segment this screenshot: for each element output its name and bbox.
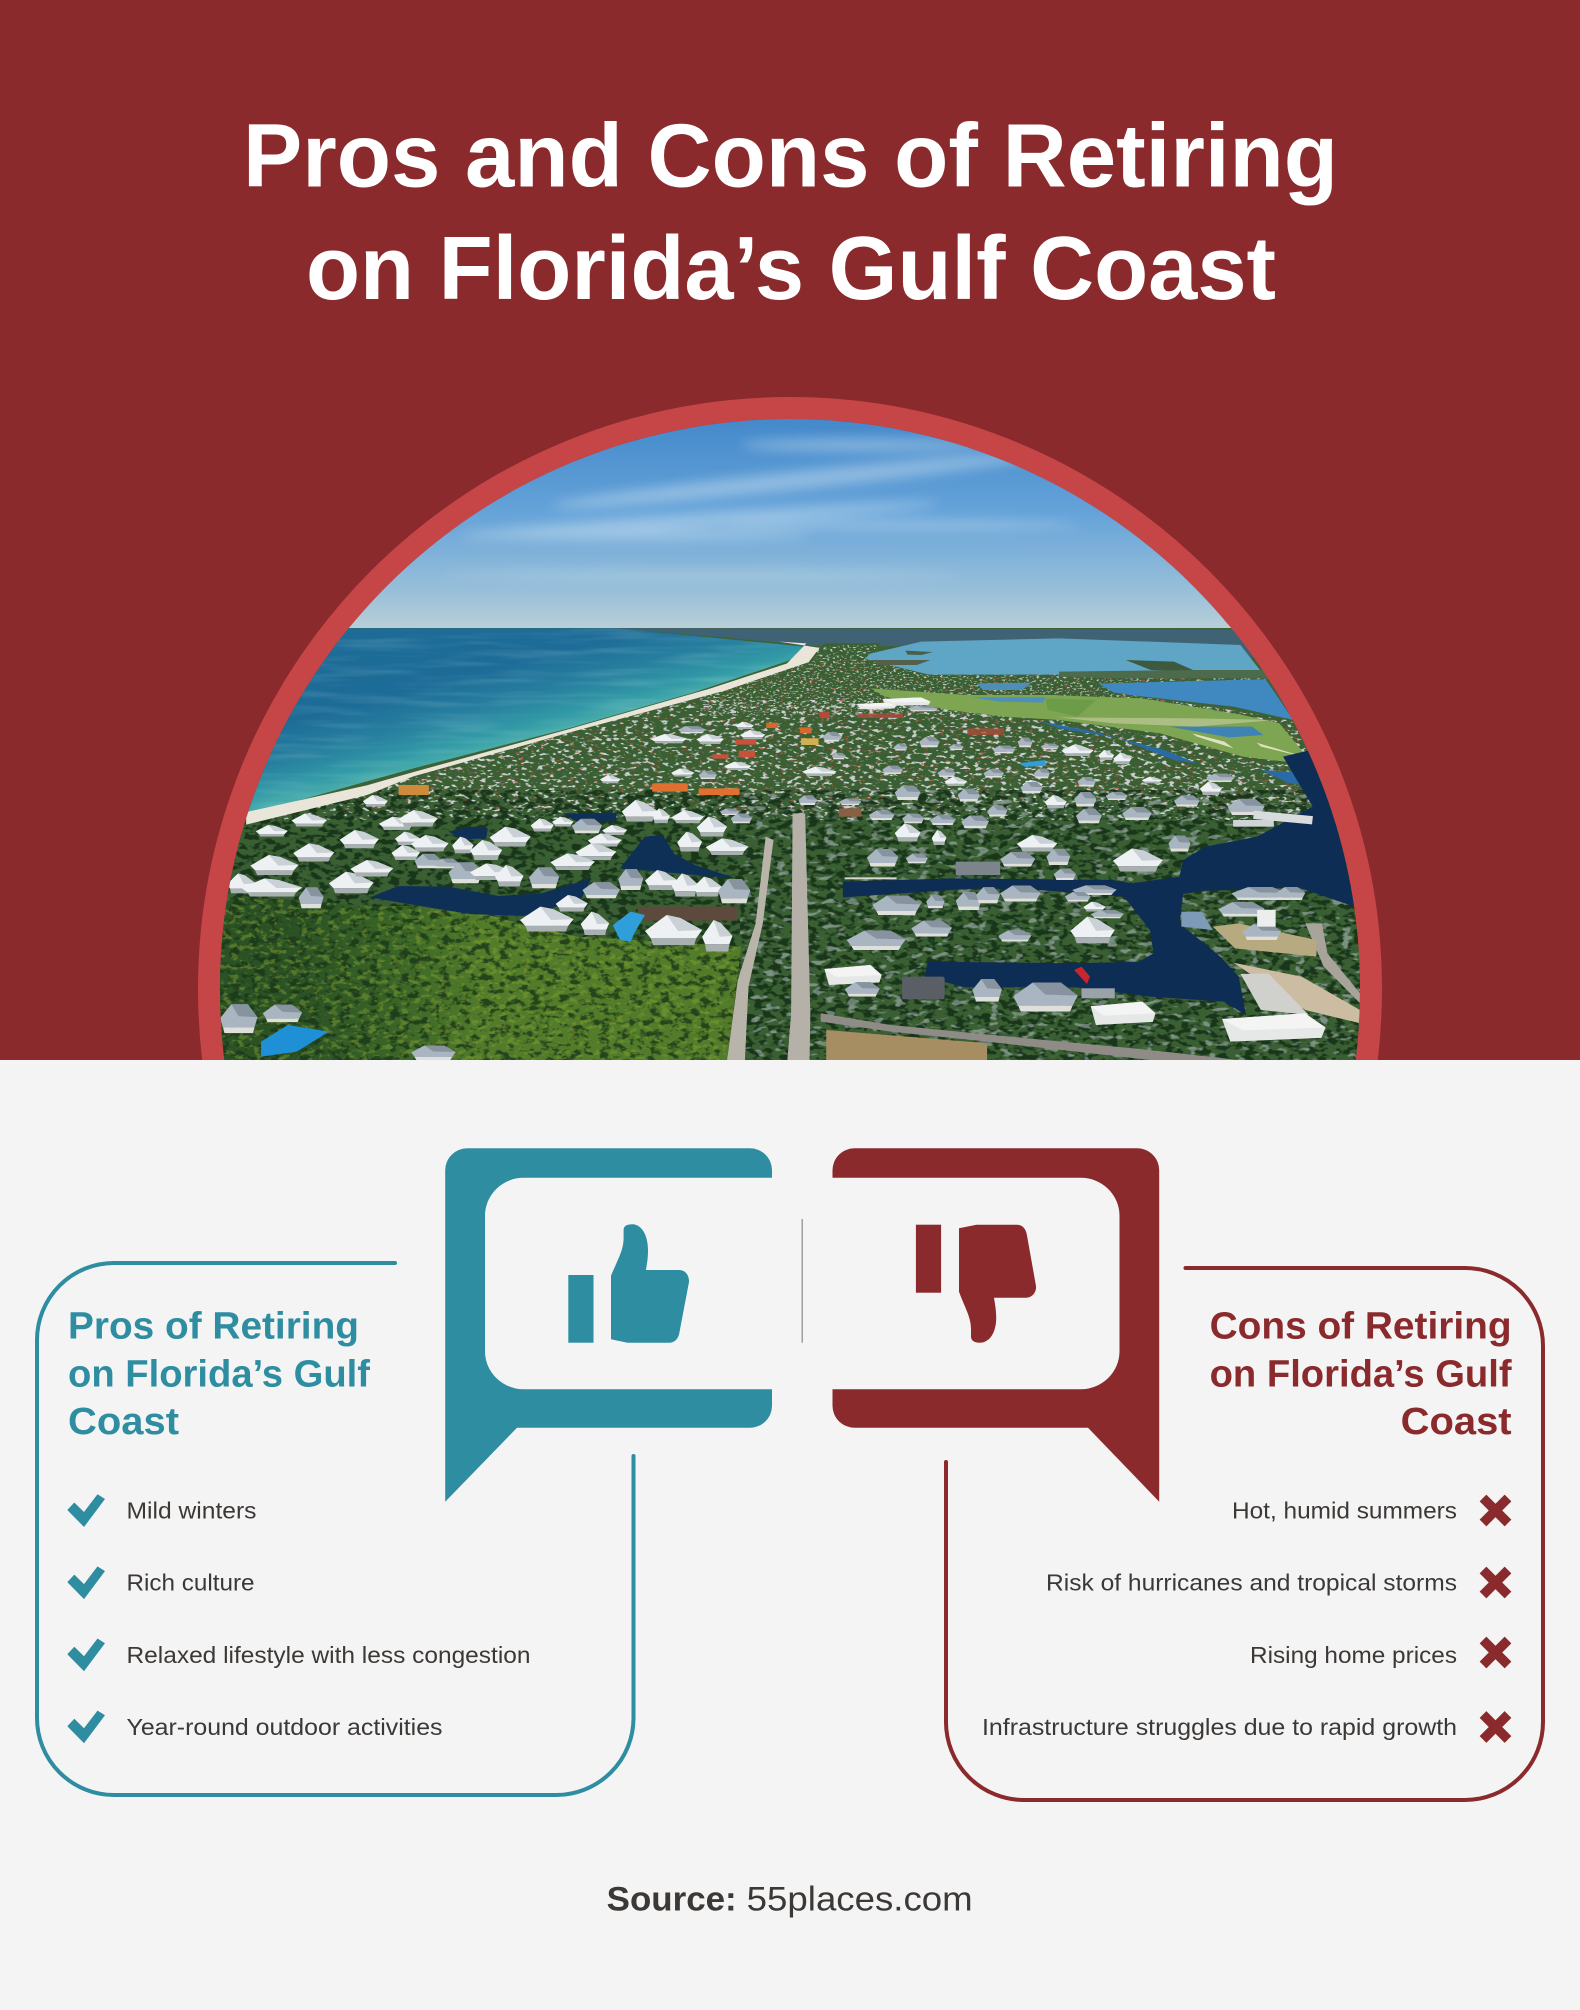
icon: check 4 <box>67 1711 105 1743</box>
item: home prices: Rising home prices <box>1250 1642 1457 1668</box>
pros heading: Coast <box>68 1401 179 1443</box>
pros heading <box>68 1306 370 1443</box>
panel: cons <box>946 1268 1543 1800</box>
speech bubble: pros <box>445 1148 772 1502</box>
photo: aerial view of gulf coast <box>180 410 1400 1068</box>
right dark water <box>843 747 1372 1015</box>
title: on Florida’s Gulf Coast <box>306 219 1276 319</box>
icon: thumbs down <box>916 1225 1036 1343</box>
panel: pros <box>37 1263 634 1795</box>
houses left cluster <box>220 783 752 1060</box>
title <box>243 107 1338 319</box>
divider between bubbles <box>802 1219 803 1343</box>
icon: x 4 <box>1483 1714 1508 1740</box>
icon: x 3 <box>1483 1640 1508 1665</box>
title: Pros and Cons of Retiring <box>243 107 1338 207</box>
bay <box>857 638 1261 677</box>
icon: x 2 <box>1483 1570 1508 1595</box>
source line: 55places.com <box>747 1881 973 1919</box>
cons heading <box>1210 1306 1512 1443</box>
cons heading: on Florida’s Gulf <box>1210 1353 1512 1395</box>
item: infrastructure: Infrastructure struggles due to rapid growth <box>982 1714 1457 1740</box>
item: mild winters: Mild winters <box>126 1498 256 1524</box>
item: hurricanes: Risk of hurricanes and tropical storms <box>1046 1570 1457 1596</box>
icon: check 2 <box>67 1566 105 1599</box>
item: hot summers: Hot, humid summers <box>1232 1498 1457 1524</box>
icon: thumbs up <box>568 1224 689 1343</box>
golf course <box>871 651 1320 787</box>
speech bubble: cons <box>832 1148 1159 1502</box>
far shore <box>615 628 1254 658</box>
icon: x 1 <box>1483 1498 1508 1523</box>
cons card outline <box>946 1268 1543 1800</box>
item: relaxed lifestyle: Relaxed lifestyle with less congestion <box>126 1642 530 1668</box>
pros card outline <box>37 1263 634 1795</box>
lagoons <box>370 813 736 916</box>
forest <box>213 897 741 1060</box>
header band <box>0 0 1580 1060</box>
source line: Source: <box>607 1881 737 1919</box>
sandy beach <box>246 638 820 825</box>
cons heading: Coast <box>1401 1401 1512 1443</box>
item: outdoor activities: Year-round outdoor activities <box>126 1714 442 1740</box>
houses right cluster <box>798 782 1326 1042</box>
pros heading: Pros of Retiring <box>68 1306 359 1348</box>
land base <box>180 643 1400 1060</box>
roads <box>787 813 1360 1060</box>
cons heading: Cons of Retiring <box>1210 1306 1512 1348</box>
icon: check 3 <box>67 1638 105 1671</box>
source line <box>607 1881 973 1919</box>
icon: check 1 <box>67 1494 105 1527</box>
pros heading: on Florida’s Gulf <box>68 1353 370 1395</box>
mid-distance houses <box>600 697 1234 789</box>
item: rich culture: Rich culture <box>126 1570 254 1596</box>
ring around photo <box>198 397 1382 1060</box>
